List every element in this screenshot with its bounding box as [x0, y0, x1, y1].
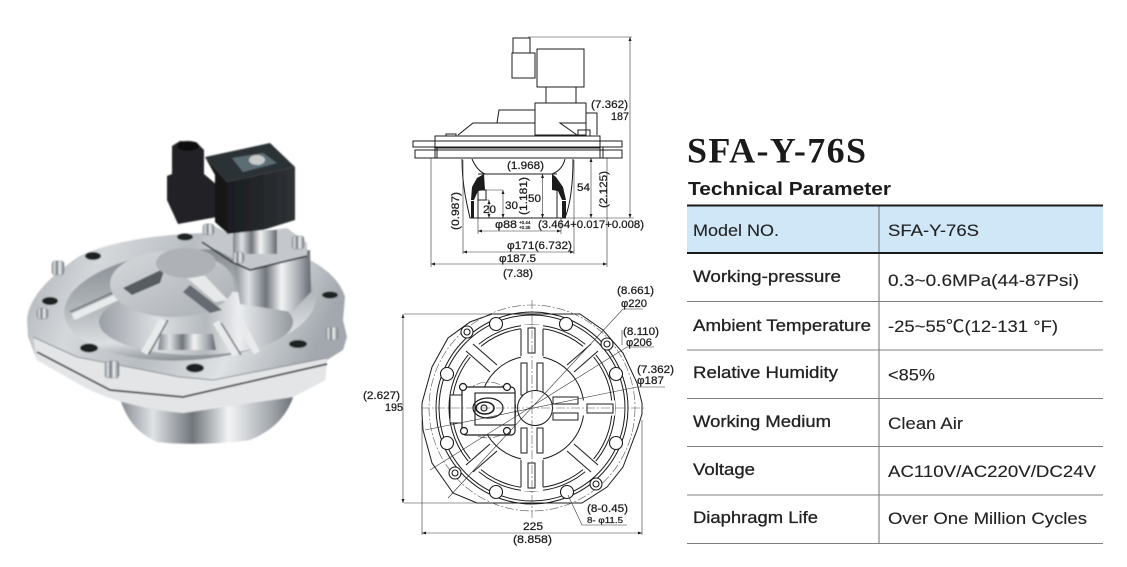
- row: working pressure: 0.3~0.6MPa(44-87Psi): [888, 271, 1079, 290]
- row: working pressure: [693, 267, 1079, 290]
- row: model no: [693, 221, 979, 240]
- top view dimension labels: (2.627): [363, 390, 400, 402]
- table header background: [687, 205, 1103, 253]
- top view dimension labels: (8.110): [623, 326, 659, 338]
- top view dimension labels: φ220: [621, 298, 647, 310]
- top view dimension labels: 195: [385, 402, 403, 414]
- side view black seals: [471, 174, 566, 218]
- row: working medium: Clean Air: [888, 414, 963, 433]
- solenoid connector: [167, 141, 217, 224]
- row: diaphragm life: [693, 508, 1087, 528]
- solenoid coil: [205, 143, 295, 234]
- side view dimension lines: [431, 37, 634, 267]
- valve bolts: [37, 224, 338, 378]
- title: SFA-Y-76S: [687, 130, 866, 170]
- row: voltage: [693, 460, 1097, 481]
- valve lower pot: [117, 375, 297, 444]
- side view dimension labels: φ187.5: [499, 253, 536, 265]
- valve dome: [110, 248, 234, 317]
- side view dimension labels: +0.44: [519, 220, 531, 225]
- valve flange silhouette: [27, 233, 347, 413]
- side view dimension labels: 50: [528, 193, 541, 205]
- side view dimension labels: (7.38): [503, 268, 533, 280]
- row: working medium: [693, 412, 963, 433]
- side view dimension labels: (0.987): [450, 192, 462, 230]
- top view solenoid: [450, 382, 516, 438]
- subtitle: technical parameter: Technical Parameter: [688, 178, 891, 199]
- side view dimension labels: 30: [505, 200, 518, 212]
- side view dimension labels: 187: [611, 111, 629, 123]
- top view dimension labels: 8- φ11.5: [587, 515, 623, 525]
- side view dimension labels: (2.125): [598, 171, 610, 208]
- side view dimension labels: +0.35: [519, 225, 531, 230]
- side view dimension labels: (1.968): [507, 160, 544, 172]
- technical drawing: top view: [363, 285, 674, 546]
- parameter table: [687, 205, 1103, 544]
- top view dimension labels: (7.362): [637, 364, 674, 376]
- row: voltage: AC110V/AC220V/DC24V: [888, 462, 1097, 481]
- valve flange front face: [33, 337, 327, 413]
- side view dimension labels: (1.181): [518, 177, 530, 215]
- row: diaphragm life: Over One Million Cycles: [888, 509, 1087, 528]
- product photo: pulse valve: [27, 141, 347, 444]
- row: working pressure: Working-pressure: [693, 267, 841, 286]
- side view dimension labels: (7.362): [591, 99, 628, 111]
- table rules: [687, 205, 1103, 544]
- row: model no: Model NO.: [693, 221, 779, 240]
- top view dimension labels: φ206: [626, 337, 652, 349]
- row: working medium: Working Medium: [693, 412, 831, 431]
- row: relative humidity: <85%: [888, 366, 935, 384]
- top view dimension labels: φ187: [637, 375, 664, 387]
- row: relative humidity: [693, 363, 935, 384]
- side view dimension labels: (3.464+0.017+0.008): [538, 219, 644, 231]
- side view dimension labels: φ88: [495, 219, 517, 231]
- top view dimension labels: (8.661): [617, 285, 654, 297]
- valve mount block and neck: [202, 223, 311, 312]
- top view dimension lines: [403, 300, 665, 535]
- row: ambient temperature: Ambient Temperature: [693, 316, 871, 335]
- row: relative humidity: Relative Humidity: [693, 363, 839, 382]
- side view dimension labels: φ171(6.732): [507, 240, 572, 252]
- row: ambient temperature: [693, 316, 1058, 336]
- side view dimension labels: 20: [483, 204, 496, 216]
- row: diaphragm life: Diaphragm Life: [693, 508, 818, 527]
- top view dimension labels: [363, 285, 674, 546]
- valve recessed ring with ribs: [60, 241, 320, 369]
- top view dimension labels: 225: [523, 521, 543, 533]
- row: ambient temperature: -25~55℃(12-131 °F): [888, 317, 1058, 336]
- top view bolt holes: [440, 318, 622, 498]
- side view valve outline: [413, 38, 622, 218]
- top view body outline: [422, 305, 642, 511]
- top view ribs and slots: [466, 325, 615, 491]
- valve flange holes: [42, 234, 338, 372]
- row: voltage: Voltage: [693, 460, 755, 479]
- technical drawing: side section: [413, 37, 644, 280]
- side view dimension labels: 54: [577, 182, 590, 194]
- top view dimension labels: (8.858): [513, 534, 552, 546]
- row: model no: SFA-Y-76S: [888, 221, 979, 240]
- top view dimension labels: (8-0.45): [587, 503, 628, 515]
- side view dimension labels: [450, 99, 644, 280]
